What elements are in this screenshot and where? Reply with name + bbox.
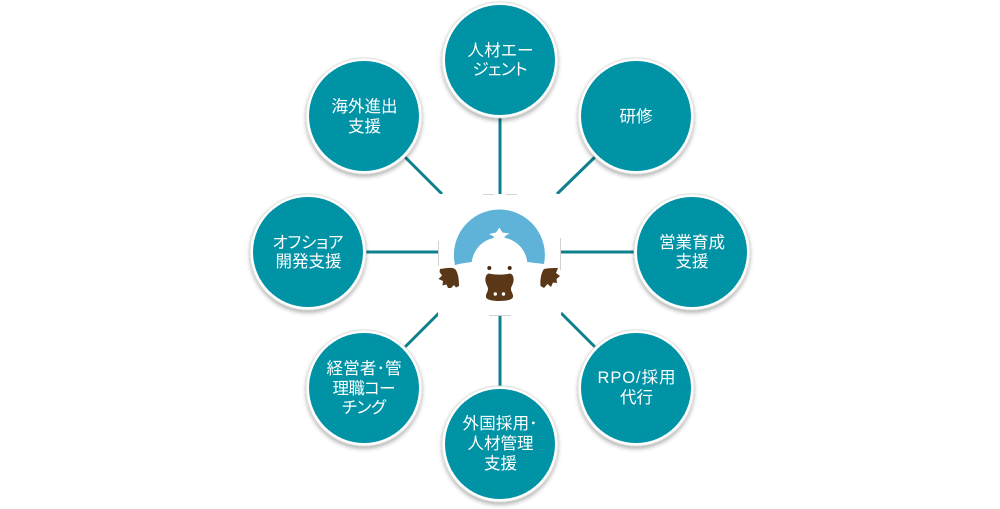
node: 外国採用・人材管理支援: 外国採用･	[462, 414, 538, 433]
mascot bill	[485, 274, 514, 301]
node: 人材エージェント: ジェント	[472, 61, 528, 79]
node: 外国採用・人材管理支援: 支援	[484, 454, 517, 473]
node: 人材エージェント: 人材エー	[468, 41, 534, 60]
connector lines	[360, 112, 640, 392]
node: オフショア開発支援: 開発支援	[276, 252, 342, 271]
node: 営業育成支援: 支援	[676, 252, 708, 271]
node: 外国採用・人材管理支援	[442, 386, 558, 502]
node: 海外進出支援	[306, 58, 422, 174]
node: 外国採用・人材管理支援: 人材管理	[468, 434, 534, 453]
node: 海外進出支援: 支援	[348, 117, 381, 136]
node: 営業育成支援: 営業育成	[659, 233, 725, 252]
mascot right foot	[540, 268, 560, 288]
mascot blue arc	[454, 210, 545, 265]
node: 経営者・管理職コーチング: チング	[342, 398, 387, 417]
node: 人材エージェント	[442, 2, 558, 118]
node: 営業育成支援	[634, 194, 750, 310]
mascot crest	[489, 228, 510, 240]
node: RPO/採用代行: 代行	[620, 388, 653, 407]
mascot nostrils	[494, 292, 497, 296]
node: 海外進出支援: 海外進出	[332, 97, 398, 116]
node: 研修: 研修	[620, 107, 653, 126]
node: RPO/採用代行: RPO/採用	[598, 368, 676, 387]
mascot eyes	[487, 266, 491, 270]
node: オフショア開発支援: オフショア	[272, 234, 344, 252]
node: 経営者・管理職コーチング	[306, 330, 422, 446]
node: 研修	[578, 58, 694, 174]
center panel	[438, 194, 561, 316]
icon: platypus mascot	[438, 210, 560, 301]
center panel edge marks	[438, 194, 560, 316]
node: 経営者・管理職コーチング: 理職コー	[332, 379, 396, 398]
node: RPO/採用代行	[578, 330, 694, 446]
mascot left foot	[438, 268, 459, 288]
node: 経営者・管理職コーチング: 経営者･管	[326, 359, 402, 378]
node: オフショア開発支援	[250, 194, 366, 310]
